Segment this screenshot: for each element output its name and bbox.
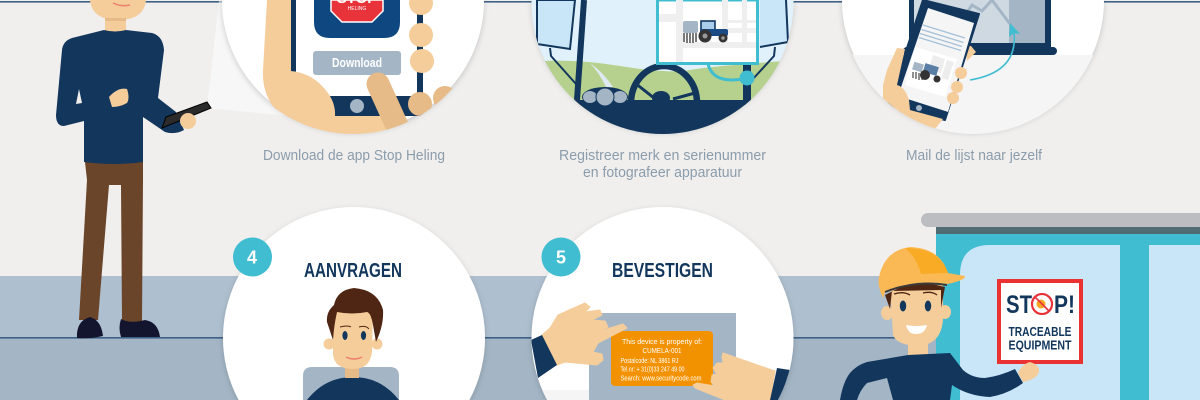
- panel: step 3 mail: [840, 0, 1110, 140]
- caption: step 2: Registreer merk en serienummer: [559, 147, 766, 164]
- sign: traceable equipment: [999, 281, 1081, 362]
- sign: traceable equipment: ST: [1006, 291, 1032, 319]
- workman with helmet: [840, 247, 1039, 400]
- caption: step 2: [559, 147, 766, 181]
- label: orange security card: CUMELA-001: [642, 346, 682, 355]
- panel: step 1 download: [222, 0, 484, 140]
- icon: steering wheel and dashboard: [574, 64, 750, 134]
- label: orange security card: Postalcode: NL 3861 RJ: [620, 356, 679, 365]
- icon: phone with app: [291, 0, 423, 116]
- person holding phone: [56, 0, 211, 338]
- panel: step 2 register: [520, 0, 800, 140]
- icon: phone with app: HELING: [348, 6, 366, 12]
- icon: right hand pressing card: [693, 353, 790, 400]
- sign: traceable equipment: TRACEABLE: [1008, 324, 1072, 339]
- arrow: phone to laptop: [970, 23, 1020, 80]
- label: orange security card: Tel.nr: + 31(0)33 247 49 00: [620, 364, 684, 374]
- label: orange security card: [611, 331, 713, 386]
- light beam from phone: [207, 0, 300, 117]
- caption: step 2: en fotografeer apparatuur: [583, 164, 742, 181]
- caption: step 3: Mail de lijst naar jezelf: [906, 147, 1043, 164]
- icon: tablet with tractor: [658, 0, 758, 86]
- sign: traceable equipment: P!: [1054, 291, 1075, 319]
- title: aanvragen: AANVRAGEN: [304, 260, 402, 282]
- label: orange security card: Search: www.securitycode.com: [620, 374, 702, 382]
- icon: hand holding phone with mail: [882, 0, 980, 128]
- icon: person portrait: [303, 288, 399, 400]
- panel: step 4 request: [223, 207, 485, 400]
- icon: laptop: [903, 0, 1057, 55]
- label: orange security card: This device is property of:: [622, 337, 702, 346]
- windshield view with hills: [530, 0, 800, 110]
- icon: phone with app: Download: [332, 55, 382, 70]
- icon: left hand pointing at card: [531, 303, 627, 378]
- panel: step 5 confirm: [530, 207, 794, 400]
- title: bevestigen: BEVESTIGEN: [612, 260, 713, 282]
- panel: building with sign: [921, 213, 1200, 400]
- sign: traceable equipment: EQUIPMENT: [1008, 338, 1072, 352]
- caption: step 1: Download de app Stop Heling: [263, 147, 445, 164]
- badge: step 4: [233, 238, 272, 276]
- badge: step 5: [542, 238, 580, 276]
- icon: hand holding phone: [263, 0, 457, 140]
- badge: step 5: 5: [556, 248, 566, 268]
- badge: step 4: 4: [247, 248, 257, 268]
